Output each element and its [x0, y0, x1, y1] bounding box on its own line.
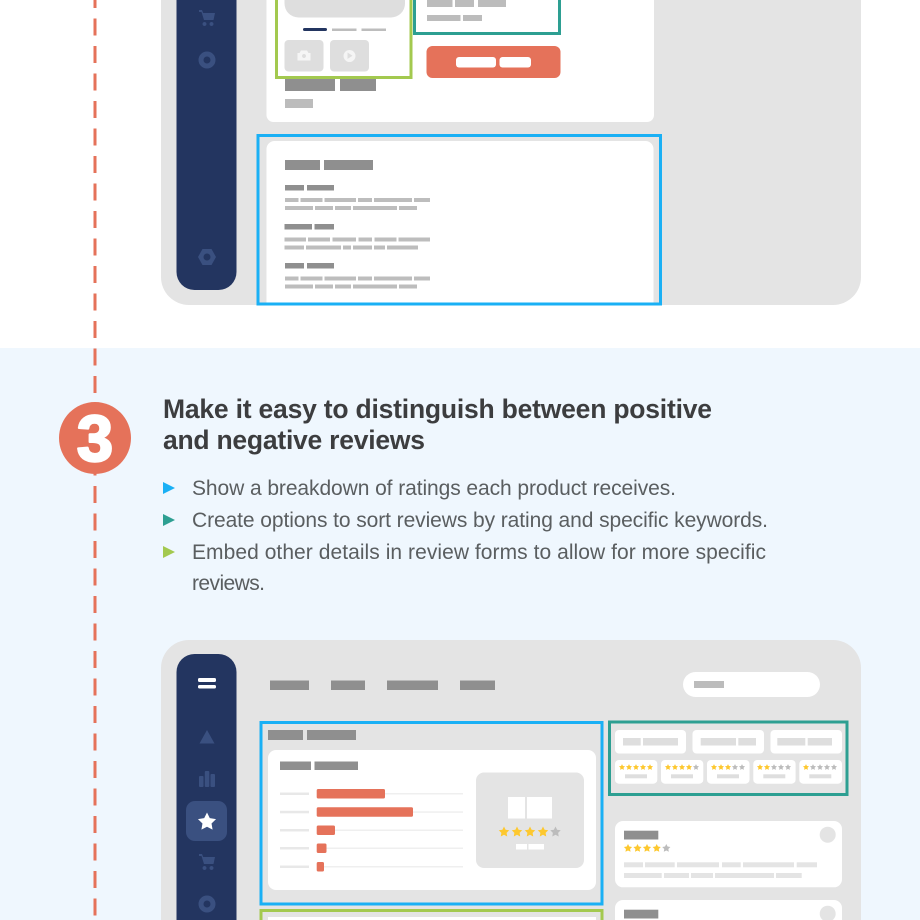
rating summary block	[268, 730, 596, 890]
description block 3	[285, 263, 430, 288]
panel: step 3 reviews mockup	[161, 640, 861, 920]
average rating tile	[476, 772, 584, 868]
teal highlight box	[414, 0, 560, 34]
icon: active star tile	[186, 801, 227, 841]
product image gallery	[284, 0, 405, 72]
product card	[266, 0, 654, 122]
rating breakdown chart	[280, 789, 463, 872]
summary card	[268, 750, 596, 890]
icon: bar chart	[199, 771, 215, 787]
icon: camera	[298, 50, 310, 60]
bullet 1: Show a breakdown of ratings each product receives.	[192, 477, 676, 500]
heading: Make it easy to distinguish between positive	[163, 394, 712, 424]
star filter chips	[615, 760, 842, 784]
filter block	[615, 730, 842, 784]
bullet 3	[163, 541, 766, 595]
search field	[683, 672, 820, 697]
teal highlight box	[610, 722, 847, 794]
green highlight box and review card	[261, 910, 602, 920]
bullet list	[163, 477, 768, 595]
top navigation bars	[270, 680, 495, 690]
product name bars	[285, 79, 376, 108]
description block 2	[284, 224, 430, 250]
summary title	[268, 730, 356, 740]
review card 1	[615, 821, 842, 887]
step number badge: 3	[77, 402, 113, 475]
timeline dashed line	[94, 0, 96, 920]
filter chips	[615, 730, 842, 754]
icon: play	[344, 50, 356, 62]
step number badge	[59, 402, 131, 475]
blue highlight box	[258, 136, 660, 304]
panel: step 2 product page mockup	[161, 0, 861, 305]
description title	[285, 160, 373, 170]
icon: cart	[199, 854, 215, 870]
green highlight box	[276, 0, 411, 78]
button	[426, 46, 560, 78]
section background: step 3	[0, 348, 920, 920]
bullet 3: reviews.	[192, 572, 265, 595]
sidebar: step 2	[176, 0, 236, 290]
sidebar: step 3	[176, 654, 236, 920]
description card	[266, 141, 654, 305]
blue highlight box	[261, 722, 602, 904]
product detail bars	[427, 0, 506, 21]
bullet 2: Create options to sort reviews by rating and specific keywords.	[192, 509, 768, 532]
description block 1	[285, 185, 430, 210]
heading: and negative reviews	[163, 425, 425, 455]
icon: triangle	[200, 730, 214, 744]
bullet 3: Embed other details in review forms to allow for more specific	[192, 541, 766, 564]
heading	[163, 394, 712, 455]
icon: menu	[198, 678, 216, 688]
review card 2	[615, 900, 842, 920]
icon: donut	[201, 898, 213, 910]
